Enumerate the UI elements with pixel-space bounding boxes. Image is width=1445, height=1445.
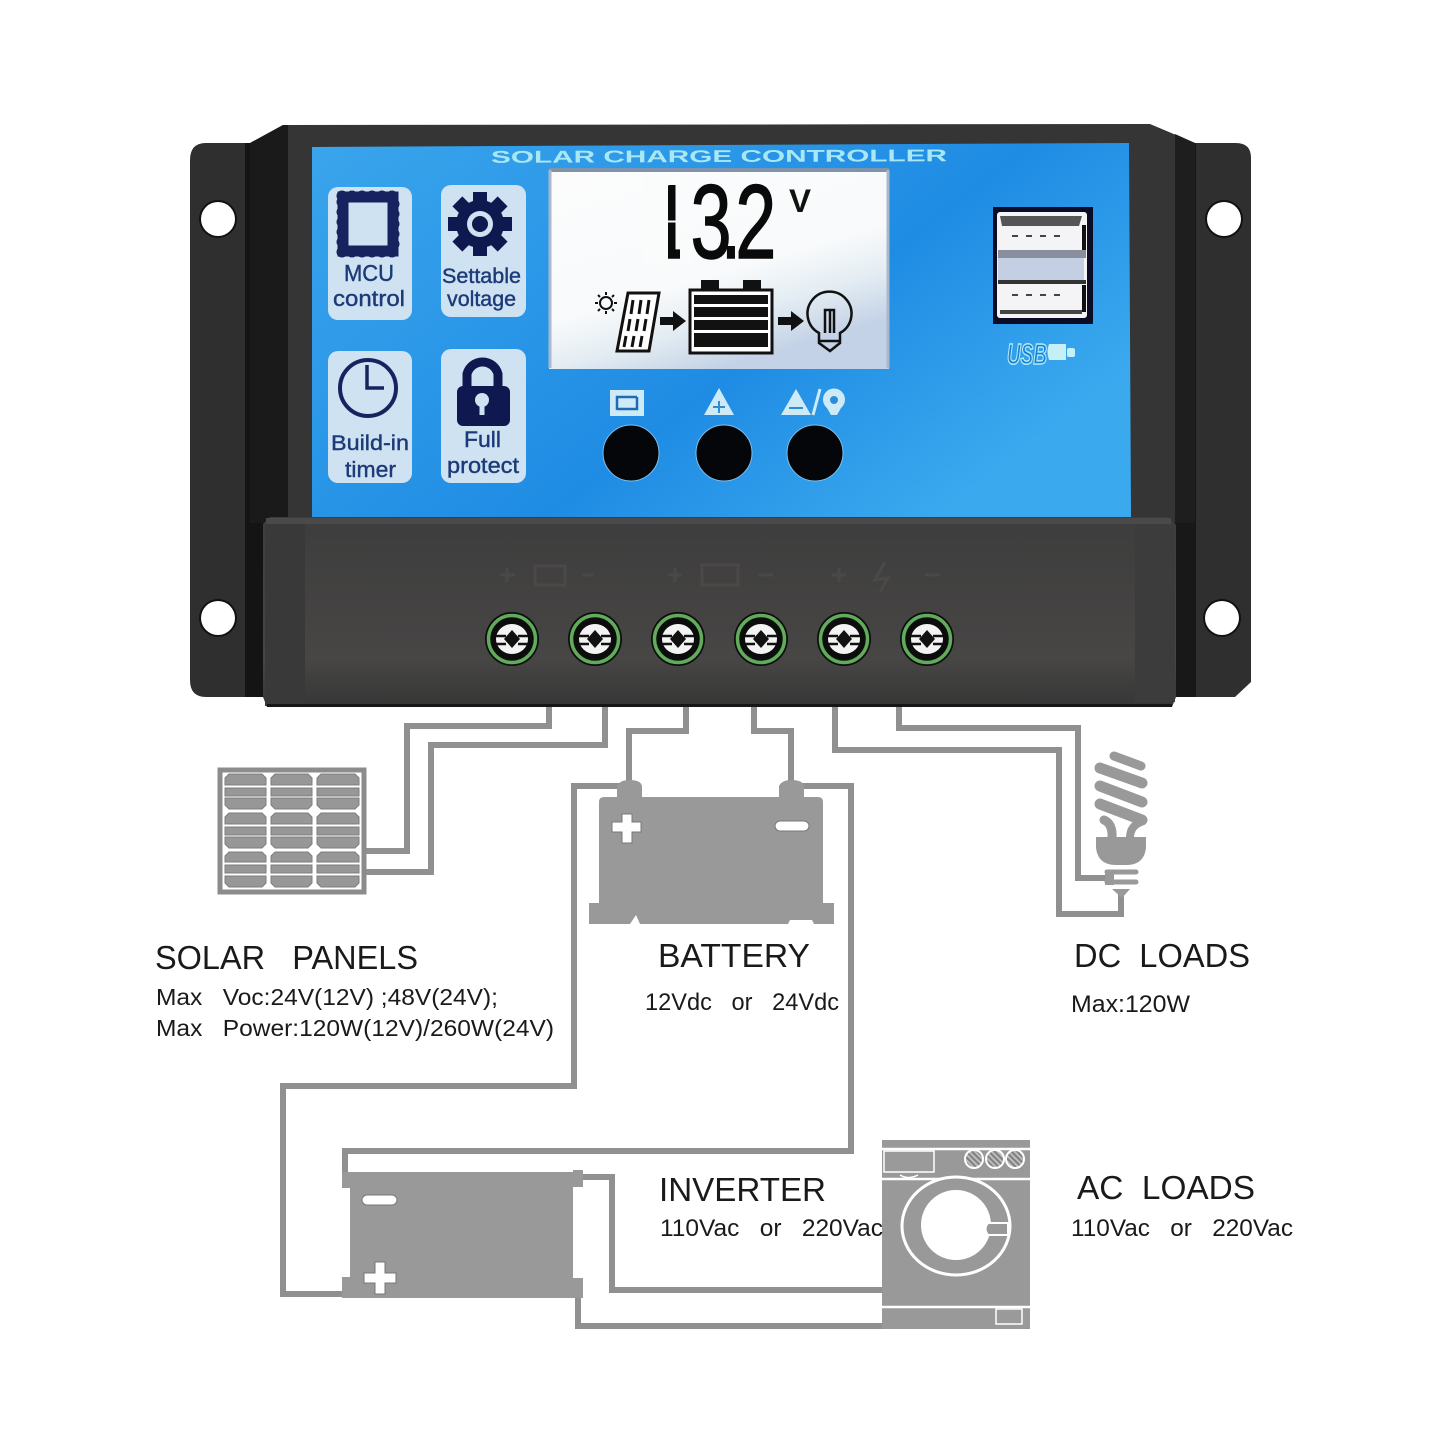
lcd icon: solar panel [617,293,659,351]
icon: washing machine [882,1140,1030,1329]
label: battery: BATTERY [658,937,810,974]
label: dc loads [1071,937,1250,1018]
bottom edge [267,704,1172,707]
badge: MCU control [328,187,412,320]
controller body [190,124,1251,707]
LCD display [549,164,889,369]
badge: build-in timer [328,351,412,483]
label: solar panels: Max Voc:24V(12V) ;48V(24V); [156,984,498,1010]
blue face panel [312,143,1131,517]
voltage reading: 13.2 [650,164,776,281]
badge: full protect: protect [447,453,519,478]
mounting flanges [190,143,1251,697]
label: ac loads: AC LOADS [1077,1169,1255,1206]
terminal screws [485,612,954,666]
badge: build-in timer: Build-in [331,432,409,455]
USB port [993,207,1093,324]
lcd icon: battery [690,280,772,353]
label: dc loads: Max:120W [1071,991,1190,1018]
label: solar panels: SOLAR PANELS [155,939,418,976]
lcd icon: arrow to bulb [778,311,804,331]
lcd icon: sun [595,292,617,314]
volt unit: V [789,183,812,219]
badge: settable voltage [441,185,526,317]
label: solar panels [155,939,554,1041]
USB label: USB [1007,339,1047,371]
upper housing [250,124,1195,523]
icon: inverter [342,1170,583,1298]
label: inverter [659,1171,883,1242]
label: inverter: INVERTER [659,1171,826,1208]
badge: settable voltage: Settable [442,265,521,288]
panel title: SOLAR CHARGE CONTROLLER [491,146,947,167]
badge: settable voltage: voltage [447,288,516,311]
lcd icon: arrow to battery [660,311,686,331]
label: solar panels: Max Power:120W(12V)/260W(24V) [156,1015,554,1041]
button icon: mode [610,390,644,416]
icon: solar panel [220,770,364,892]
button icon: plus [704,388,734,415]
badge: full protect [441,349,526,483]
label: ac loads [1071,1169,1293,1242]
icon: battery [589,780,834,924]
badge: MCU control: control [333,286,405,311]
lcd icon: bulb [808,292,851,351]
badge: MCU control: MCU [344,260,394,286]
button icon: minus and light [781,389,845,415]
label: dc loads: DC LOADS [1074,937,1250,974]
label: battery [645,937,839,1016]
terminal block [263,517,1176,707]
badge: full protect: Full [464,427,501,452]
buttons [603,425,843,481]
label: ac loads: 110Vac or 220Vac [1071,1215,1293,1242]
badge: build-in timer: timer [345,457,396,482]
icon: cfl bulb [1096,756,1146,898]
label: battery: 12Vdc or 24Vdc [645,989,839,1016]
wiring [283,707,1121,1326]
label: inverter: 110Vac or 220Vac [660,1215,883,1242]
